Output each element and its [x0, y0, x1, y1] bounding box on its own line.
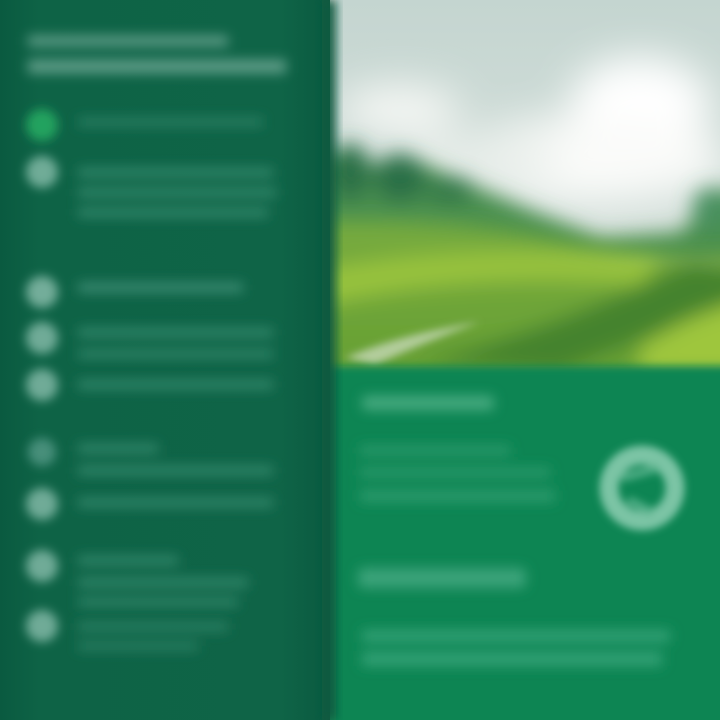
path highlight	[345, 322, 480, 365]
text block: first paragraph	[360, 446, 555, 502]
panel: left sidebar	[0, 0, 336, 720]
heading: second block	[358, 568, 526, 588]
list item 5	[26, 369, 273, 401]
list item 1	[26, 109, 263, 141]
distant trees	[300, 144, 720, 270]
list item 9	[26, 610, 228, 650]
list item 8	[26, 550, 248, 606]
panel: lower right green block	[320, 366, 720, 720]
hills	[300, 221, 720, 385]
list item 3	[26, 276, 243, 308]
list item 7	[26, 488, 273, 520]
list item 4	[26, 322, 273, 358]
heading: top right block	[362, 396, 494, 410]
title	[28, 36, 286, 73]
clouds	[340, 57, 720, 202]
text block: second paragraph	[362, 630, 670, 666]
list item 2	[26, 156, 276, 217]
panel: landscape photo	[300, 0, 720, 385]
icon: recycling circle	[609, 455, 675, 521]
list item 6	[28, 438, 273, 475]
